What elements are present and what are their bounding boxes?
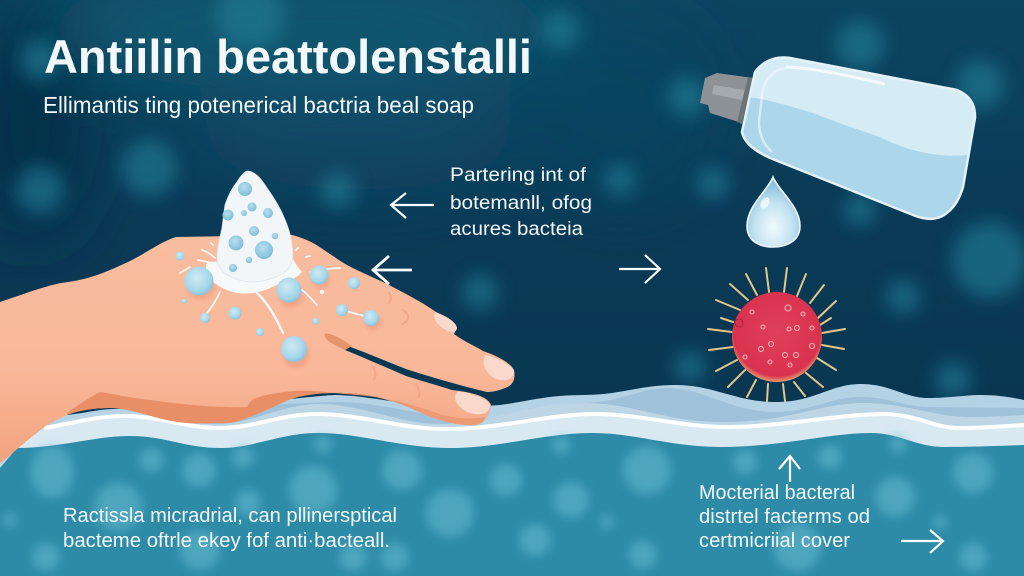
bottle liquid: [742, 97, 969, 219]
subtitle: Ellimantis ting potenerical bactria beal soap: [43, 92, 474, 118]
water: white crest line: [44, 414, 1024, 429]
water drop: [747, 177, 800, 247]
bubbles on soap: [222, 182, 278, 272]
bubble shadows on skin: [187, 271, 381, 368]
splash tendrils: [180, 243, 370, 333]
soap bar: [217, 171, 293, 282]
bottle rim: [742, 58, 975, 219]
soap splash: [180, 243, 370, 333]
finger notch crease: [324, 334, 352, 350]
water: third wave band: [0, 403, 1024, 576]
bacterium: [708, 268, 845, 401]
finger nails: [434, 312, 514, 414]
arrow: up: [779, 456, 800, 482]
water bokeh: [3, 435, 993, 571]
arrow: to hand: [373, 256, 412, 284]
water: second wave band: [0, 388, 1024, 576]
callout: top centre: [450, 164, 592, 240]
finger underside shadow: [334, 393, 485, 425]
hand: [0, 235, 515, 463]
arrow: to soap top: [391, 193, 434, 218]
callout: bottom right: certmicriial cover: [699, 530, 850, 552]
bottle neck: [737, 77, 753, 124]
bottle cap: [700, 73, 753, 123]
wrist shadow: [67, 391, 334, 424]
arrows: [373, 193, 943, 553]
bottle cap stripe: [712, 85, 745, 100]
callout: bottom right: [699, 482, 870, 552]
background bokeh: [16, 0, 1024, 398]
background glow: [0, 0, 710, 240]
callout: top centre: botemanll, ofog: [450, 192, 592, 214]
spots: [735, 305, 814, 367]
title: Antiilin beattolenstalli: [44, 30, 532, 83]
callout: bottom left: bacteme oftrle ekey fof anti·bacteall.: [63, 530, 390, 552]
bubbles on hand: [176, 252, 379, 362]
body: [732, 292, 822, 382]
arrow: bottom right: [901, 530, 943, 553]
knuckle folds: [372, 292, 419, 398]
water: pale foam band: [0, 414, 1024, 460]
water: lower teal area: [0, 433, 1024, 576]
callout: top centre: acures bacteia: [450, 218, 583, 240]
spikes: [708, 268, 845, 401]
callout: top centre: Partering int of: [450, 164, 587, 186]
bottle highlight: [759, 68, 786, 152]
bottle body: [742, 58, 975, 219]
arrow: to bacterium: [619, 255, 660, 283]
callout: bottom left: Ractissla micradrial, can pllinersptical: [63, 505, 397, 527]
hand shape: [0, 235, 515, 463]
callout: bottom right: Mocterial bacteral: [699, 482, 855, 504]
water: top wave band: [0, 384, 1024, 576]
bottle: [700, 58, 975, 219]
callout: bottom left: [63, 505, 397, 552]
splash puddle: [206, 258, 302, 294]
callout: bottom right: distrtel facterms od: [699, 506, 870, 528]
